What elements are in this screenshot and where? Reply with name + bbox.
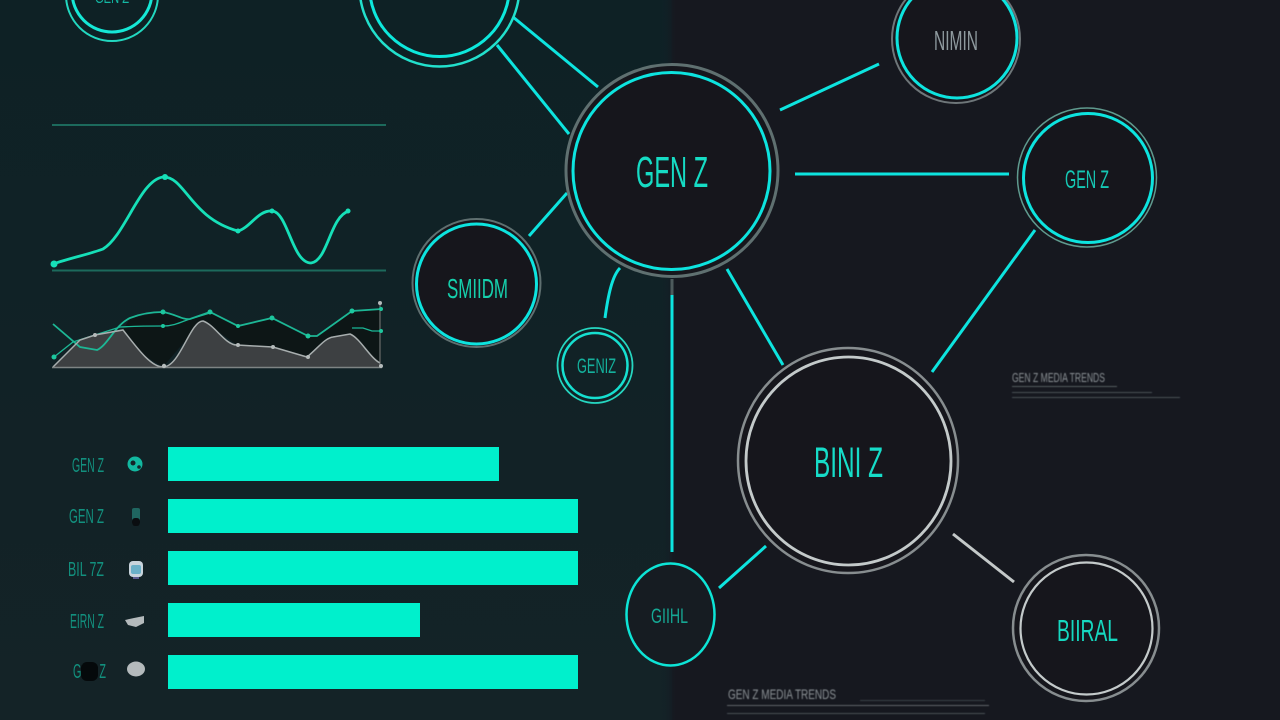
- background: right panel: [672, 0, 1280, 720]
- row 4: [70, 603, 420, 637]
- node: bottom ellipse: [626, 564, 714, 666]
- row 1: [72, 447, 499, 481]
- node: top-left partial circle: [66, 0, 158, 41]
- node: top right: NIMIN: [934, 25, 978, 56]
- connector lines: [497, 17, 1035, 588]
- bar chart: [68, 447, 578, 689]
- node: small circle: [558, 328, 632, 403]
- text block: bottom caption: GEN Z MEDIA TRENDS: [728, 686, 836, 702]
- node: SMIDM: [412, 219, 540, 347]
- node: right: GEN Z: [1065, 166, 1109, 194]
- background: left panel: [0, 0, 672, 720]
- text block: right caption: GEN Z MEDIA TRENDS: [1012, 370, 1105, 385]
- node: top partial circle: [360, 0, 520, 66]
- node: large BINI Z: [738, 348, 958, 573]
- node: large BINI Z: BINI Z: [814, 439, 883, 487]
- row 4: EIRN Z: [70, 611, 104, 633]
- node: bottom right: BIIRAL: [1057, 613, 1118, 648]
- node: right: [1018, 108, 1156, 247]
- node: central GEN Z: GEN Z: [636, 148, 708, 197]
- node: small circle: GENIZ: [577, 355, 616, 378]
- row 2: [69, 499, 578, 533]
- row 3: BIL 7Z: [68, 559, 104, 581]
- row 3: [68, 551, 578, 585]
- background: soft seam: [660, 0, 676, 720]
- line chart: [50, 125, 386, 270]
- row 1: GEN Z: [72, 455, 104, 477]
- area chart: [52, 301, 383, 368]
- row 2: GEN Z: [69, 506, 104, 528]
- row 5: [73, 655, 578, 689]
- node: bottom right: [1013, 555, 1159, 701]
- node: central GEN Z: [566, 64, 778, 276]
- node: SMIDM: SMIIDM: [447, 273, 508, 304]
- node: bottom ellipse: GIIHL: [651, 605, 688, 628]
- node: top right: [892, 0, 1020, 103]
- row 5: GEN Z: [73, 661, 106, 683]
